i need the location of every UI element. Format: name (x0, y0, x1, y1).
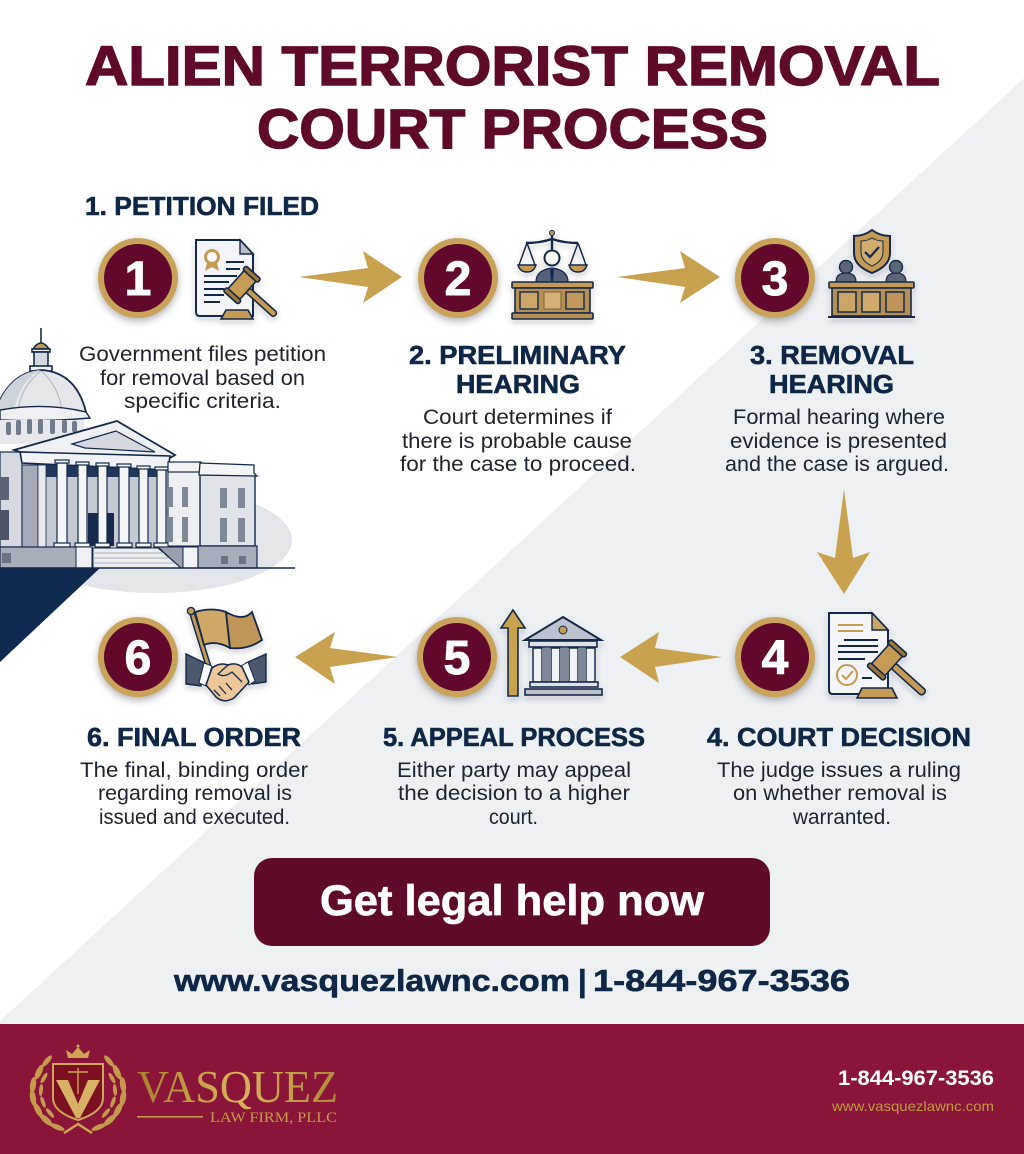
description: step 6: issued and executed. (99, 805, 290, 829)
step 6 (80, 607, 308, 829)
description: step 1: Government files petition (79, 342, 326, 366)
description: step 4 (717, 758, 961, 829)
icon: decision document and gavel (829, 613, 936, 707)
description: step 5: Either party may appeal (397, 758, 631, 782)
description: step 3: evidence is presented (730, 429, 947, 453)
call to action button: Get legal help now (320, 877, 705, 925)
heading: step 6: 6. FINAL ORDER (87, 724, 301, 752)
badge: number 5: 5 (444, 632, 470, 685)
description: step 2: there is probable cause (402, 429, 632, 453)
logo: crest and firm name (29, 1044, 338, 1133)
step 1 (79, 193, 326, 413)
heading: step 2: HEARING (456, 371, 580, 399)
heading: step 3: HEARING (769, 371, 894, 399)
description: step 1 (79, 342, 326, 413)
badge: number 5 (417, 617, 497, 697)
badge: number 2: 2 (445, 253, 471, 306)
description: step 1: specific criteria. (124, 389, 281, 413)
description: step 2: Court determines if (423, 405, 612, 429)
footer band (0, 1024, 1024, 1154)
logo crest (29, 1044, 127, 1133)
description: step 5: court. (489, 805, 538, 829)
arrow: step 3 to 4 (817, 489, 870, 594)
description: step 6 (80, 758, 308, 829)
badge: number 3 (735, 238, 815, 318)
description: step 4: warranted. (792, 805, 891, 829)
icon: judge with scales at bench (512, 230, 593, 319)
description: step 3: Formal hearing where (733, 405, 945, 429)
arrow: step 4 to 5 (620, 632, 722, 683)
badge: number 1 (98, 238, 178, 318)
footer website: www.vasquezlawnc.com (831, 1098, 994, 1114)
badge: number 4 (735, 617, 815, 697)
step 2 (400, 230, 636, 476)
description: step 1: for removal based on (100, 366, 305, 390)
heading: step 4: 4. COURT DECISION (707, 724, 971, 752)
contact line: www.vasquezlawnc.com (173, 963, 570, 998)
title: COURT PROCESS (257, 97, 768, 160)
badge: number 2 (418, 238, 498, 318)
badge: number 6: 6 (125, 632, 151, 685)
badge: number 3: 3 (762, 253, 788, 306)
arrow: step 1 to 2 (299, 251, 402, 303)
call to action button (254, 858, 770, 946)
description: step 6: The final, binding order (80, 758, 308, 782)
badge: number 4: 4 (762, 632, 789, 685)
badge: number 1: 1 (125, 253, 151, 306)
title (85, 34, 940, 160)
description: step 4: on whether removal is (733, 781, 947, 805)
step 4 (707, 613, 971, 829)
heading: step 1: 1. PETITION FILED (85, 193, 319, 221)
logo wordmark: VASQUEZ (137, 1061, 338, 1112)
description: step 5 (397, 758, 631, 829)
heading: step 3 (750, 342, 914, 399)
description: step 2: for the case to proceed. (400, 452, 636, 476)
badge: number 6 (98, 617, 178, 697)
step 3 (725, 230, 949, 476)
contact line (173, 963, 850, 998)
title: ALIEN TERRORIST REMOVAL (85, 34, 940, 97)
step 5 (383, 610, 645, 829)
heading: step 2: 2. PRELIMINARY (409, 342, 626, 370)
heading: step 3: 3. REMOVAL (750, 342, 914, 370)
description: step 4: The judge issues a ruling (717, 758, 961, 782)
arrow: step 2 to 3 (617, 251, 720, 303)
description: step 2 (400, 405, 636, 476)
icon: flag and handshake (186, 607, 266, 701)
footer phone: 1-844-967-3536 (838, 1067, 994, 1090)
heading: step 2 (409, 342, 626, 399)
heading: step 5: 5. APPEAL PROCESS (383, 724, 645, 752)
arrow: step 5 to 6 (295, 632, 398, 684)
description: step 3: and the case is argued. (725, 452, 949, 476)
contact line: 1-844-967-3536 (593, 963, 850, 998)
contact line: | (578, 963, 587, 998)
description: step 6: regarding removal is (98, 781, 292, 805)
description: step 3 (725, 405, 949, 476)
logo wordmark: LAW FIRM, PLLC (210, 1110, 337, 1126)
illustration: courthouse building (0, 328, 295, 662)
icon: petition document and gavel (196, 240, 287, 328)
icon: shield above hearing bench (828, 230, 915, 317)
description: step 5: the decision to a higher (398, 781, 630, 805)
icon: upward arrow and higher court (501, 610, 602, 696)
